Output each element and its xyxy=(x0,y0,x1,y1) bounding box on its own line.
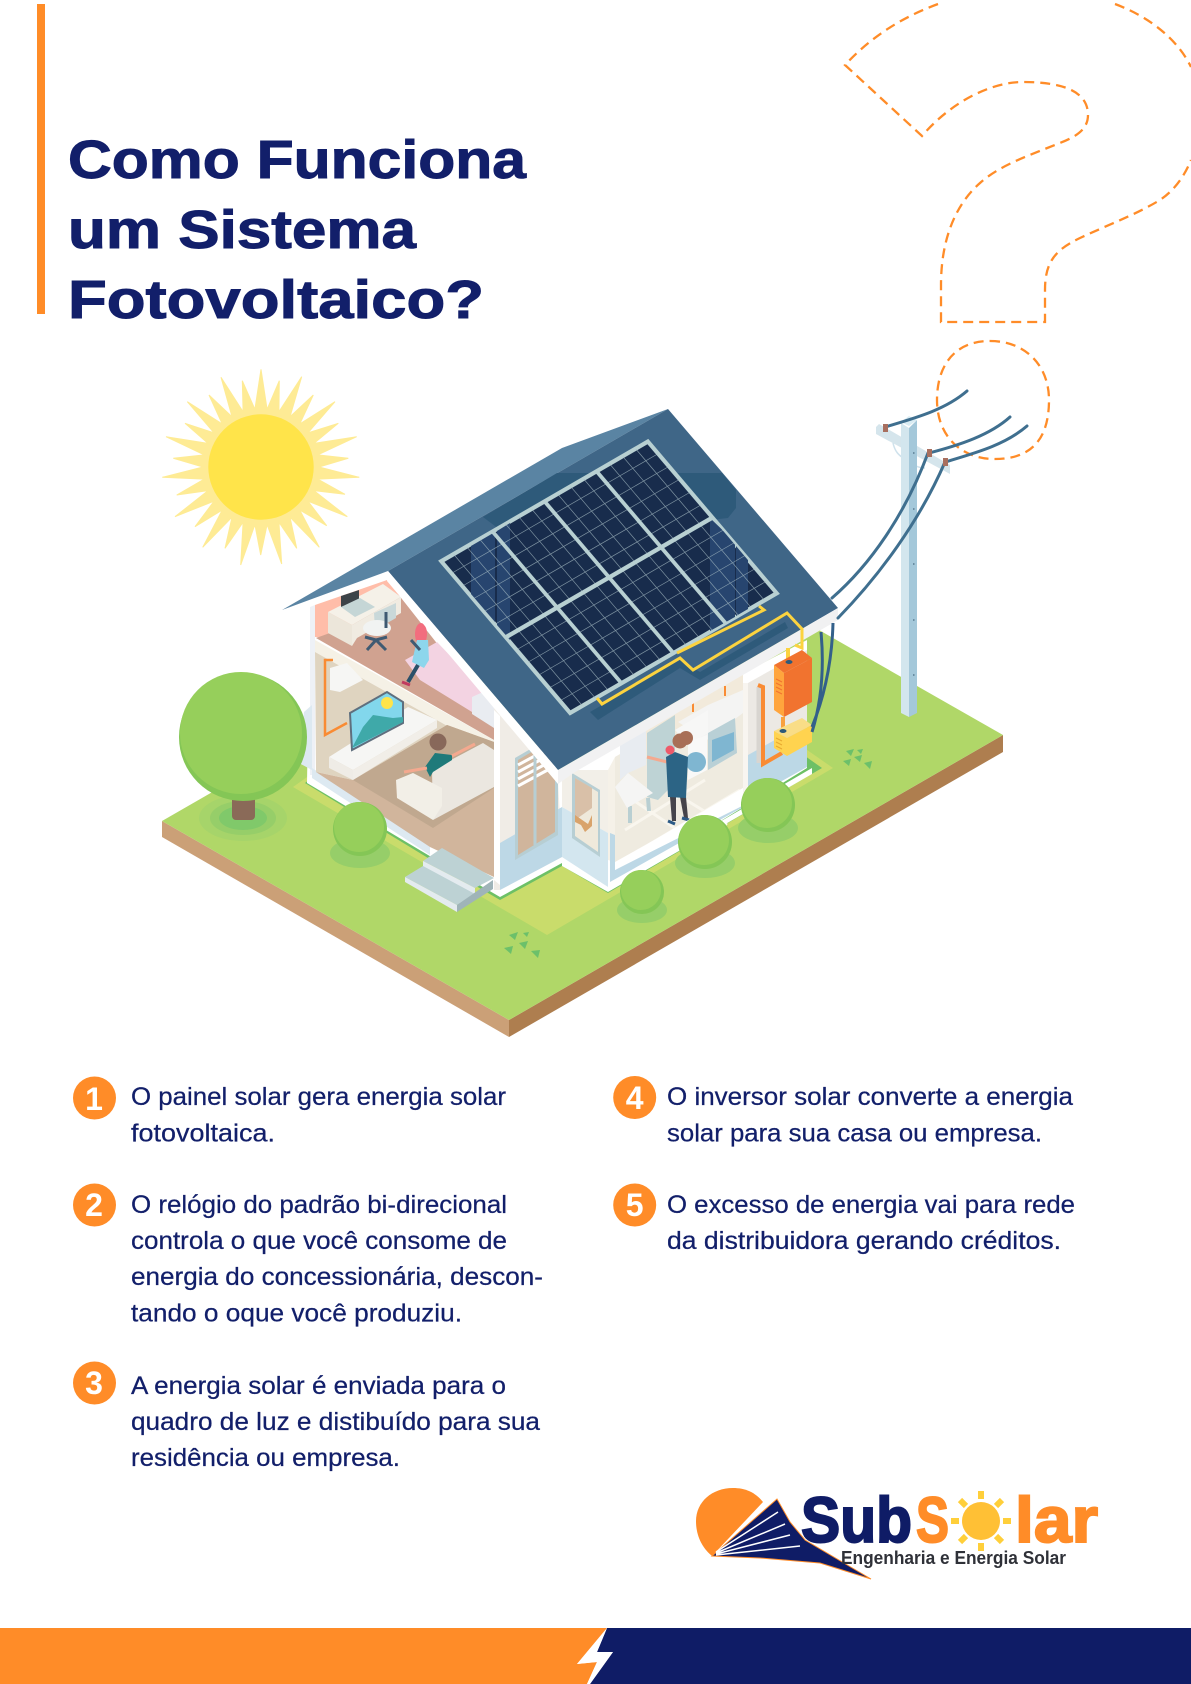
step 4: solar para sua casa ou empresa. xyxy=(667,1120,1042,1148)
logo: SubSolar: lar xyxy=(1015,1484,1098,1556)
tree shadow xyxy=(199,795,287,841)
inverter box xyxy=(774,648,812,731)
step 5: O excesso de energia vai para rede xyxy=(667,1191,1075,1219)
air conditioner xyxy=(330,663,363,692)
house base outline xyxy=(305,640,822,900)
counter xyxy=(678,690,743,740)
grass tufts xyxy=(504,749,872,958)
step 5: 5 xyxy=(626,1187,644,1223)
icon: sun xyxy=(162,369,359,565)
bed xyxy=(405,642,483,712)
step 5: da distribuidora gerando créditos. xyxy=(667,1227,1061,1255)
logo solar fan xyxy=(712,1499,871,1579)
logo sun disc xyxy=(696,1488,763,1556)
step 3: residência ou empresa. xyxy=(131,1444,400,1472)
sofa xyxy=(396,743,494,820)
title: Como Funciona xyxy=(68,130,527,190)
desk xyxy=(328,584,401,625)
big tree xyxy=(179,672,307,820)
step 3: A energia solar é enviada para o xyxy=(131,1372,506,1400)
logo: SubSolar: Engenharia e Energia Solar xyxy=(841,1547,1066,1568)
footer band xyxy=(0,1628,1191,1684)
step 5 xyxy=(613,1184,1075,1255)
electric meter box xyxy=(774,718,812,756)
step 3: 3 xyxy=(85,1365,103,1401)
tv xyxy=(350,692,403,750)
step 2 xyxy=(73,1184,543,1328)
bush 2 xyxy=(738,778,798,843)
solar panels xyxy=(440,440,788,720)
accents xyxy=(693,686,725,712)
man on sofa xyxy=(404,734,475,777)
title: Fotovoltaico? xyxy=(68,270,484,330)
step 3 xyxy=(73,1362,540,1472)
step 4: 4 xyxy=(626,1080,644,1116)
fridge xyxy=(647,715,675,800)
roof xyxy=(282,409,838,784)
bush 1 xyxy=(330,802,390,868)
title: um Sistema xyxy=(68,200,417,260)
table xyxy=(615,773,653,823)
utility pole and wires xyxy=(832,391,1027,717)
gable wall with window xyxy=(494,707,562,890)
step 2: O relógio do padrão bi-direcional xyxy=(131,1191,507,1219)
gray and orange pipes xyxy=(756,687,762,763)
logo: SubSolar: Sub xyxy=(801,1484,912,1556)
bush 4 xyxy=(617,870,667,923)
steps xyxy=(405,848,494,912)
step 1: fotovoltaica. xyxy=(131,1120,275,1148)
step 2: energia do concessionária, descon- xyxy=(131,1263,543,1291)
accent bar xyxy=(37,4,45,314)
step 1 xyxy=(73,1076,506,1148)
step 2: tando o oque você produziu. xyxy=(131,1300,462,1328)
step 4 xyxy=(613,1076,1073,1148)
step 2: controla o que você consome de xyxy=(131,1227,507,1255)
washing machine xyxy=(686,735,707,780)
woman in kitchen xyxy=(647,731,693,824)
dashed question mark xyxy=(845,4,1191,459)
door section with cat xyxy=(562,770,608,892)
right wall xyxy=(608,650,812,892)
orange conduit xyxy=(325,660,347,735)
logo: SubSolar: S xyxy=(916,1484,949,1556)
tv stand xyxy=(329,707,437,780)
upper room xyxy=(315,580,495,752)
house walls xyxy=(297,571,812,912)
white wall panel xyxy=(620,730,646,780)
bush 3 xyxy=(675,815,735,878)
ground platform xyxy=(162,537,1003,1037)
step 2: 2 xyxy=(85,1187,103,1223)
logo: SubSolar xyxy=(696,1484,1098,1579)
woman sitting xyxy=(402,623,429,685)
yellow conduits xyxy=(597,606,802,704)
step 1: O painel solar gera energia solar xyxy=(131,1083,506,1111)
service cables xyxy=(812,623,833,732)
kitchen xyxy=(608,672,748,882)
step 3: quadro de luz e distibuído para sua xyxy=(131,1408,540,1436)
icon: lightning bolt xyxy=(577,1628,613,1684)
oven xyxy=(708,718,737,770)
logo sun xyxy=(951,1491,1011,1551)
step 4: O inversor solar converte a energia xyxy=(667,1083,1073,1111)
laptop xyxy=(341,590,359,607)
title xyxy=(68,130,527,330)
step 1: 1 xyxy=(85,1081,103,1117)
lower room xyxy=(315,652,494,877)
isometric house scene xyxy=(162,391,1027,1037)
office chair xyxy=(363,603,396,650)
